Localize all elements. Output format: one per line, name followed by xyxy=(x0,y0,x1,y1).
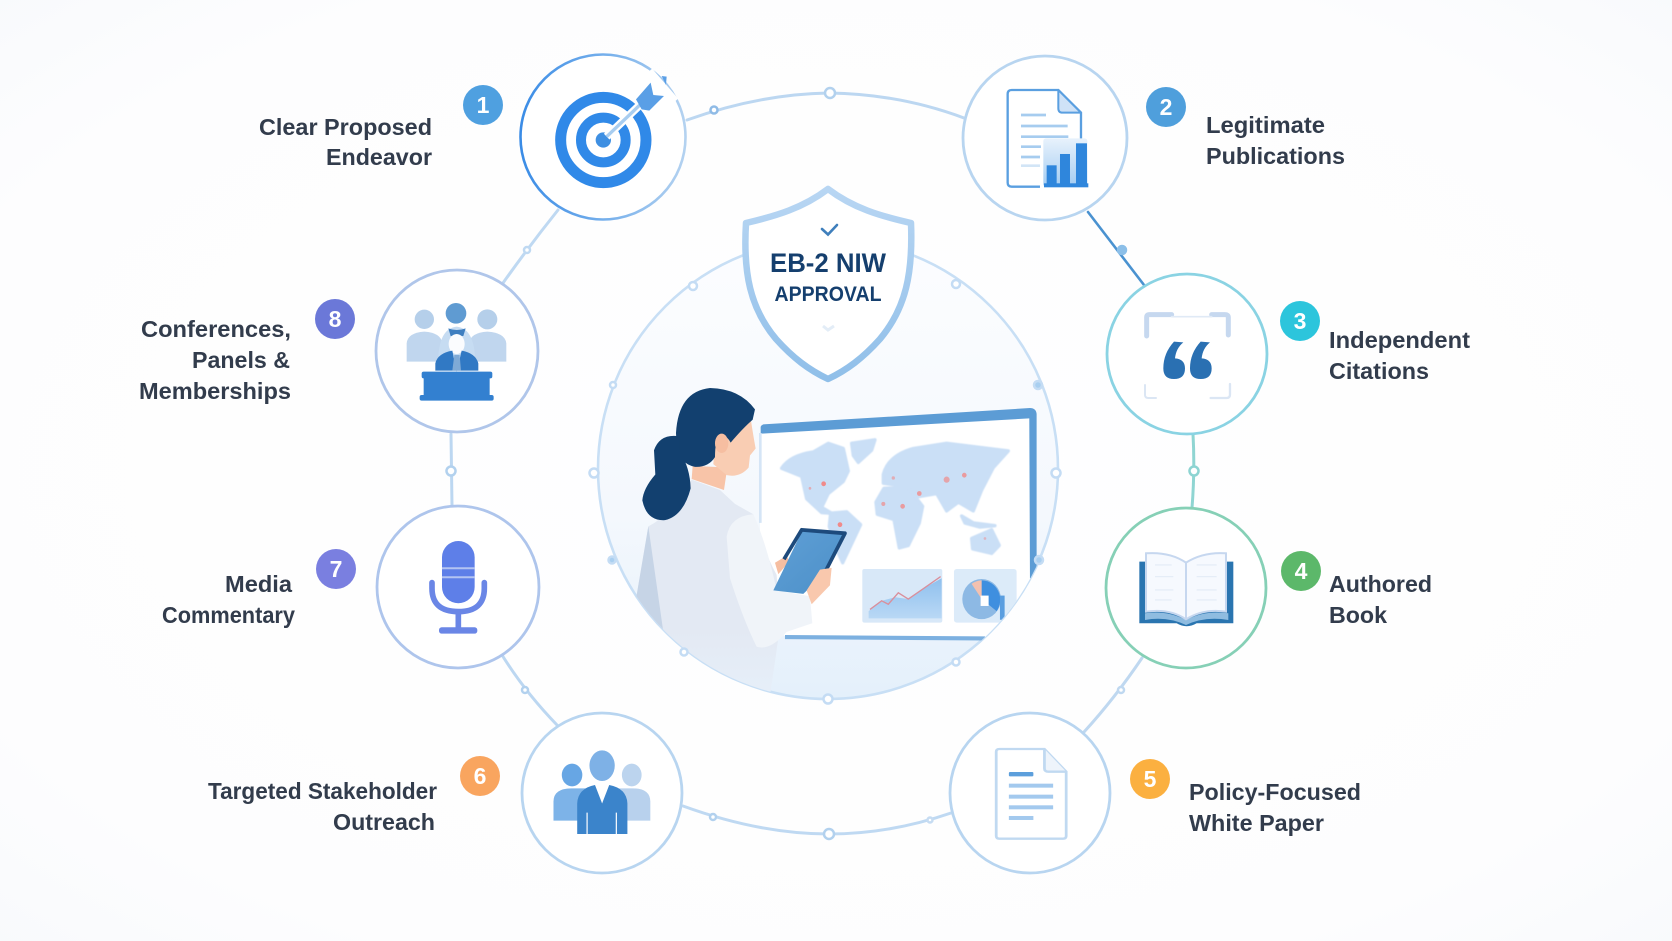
screen xyxy=(759,408,1037,638)
icon: microphone xyxy=(432,541,484,634)
icon: quotation marks xyxy=(1145,315,1230,398)
icon: white paper document xyxy=(996,749,1066,839)
background disc xyxy=(598,239,1058,699)
badge 8 xyxy=(315,299,355,339)
badge 7: 7 xyxy=(330,556,342,582)
panel: step 2 legitimate publications xyxy=(963,56,1345,220)
node circle xyxy=(377,506,539,668)
icon: three stakeholders xyxy=(553,750,650,834)
node circle xyxy=(950,713,1110,873)
label 7: Commentary xyxy=(162,602,295,628)
node circle xyxy=(520,54,686,220)
shield badge xyxy=(745,189,911,379)
label 8: Memberships xyxy=(139,378,291,404)
badge 3: 3 xyxy=(1294,308,1306,334)
label 1: Endeavor xyxy=(326,144,432,170)
panel: step 3 independent citations xyxy=(1107,274,1470,434)
label 8: Conferences, xyxy=(141,316,291,342)
icon: open book xyxy=(1139,553,1233,626)
map hotspots xyxy=(809,473,986,540)
badge 5 xyxy=(1130,759,1170,799)
badge 6 xyxy=(460,756,500,796)
label 4: Book xyxy=(1329,602,1388,628)
icon: target xyxy=(561,70,677,183)
panel: step 5 policy-focused white paper xyxy=(950,713,1361,873)
disc nodes xyxy=(590,280,1060,704)
node circle xyxy=(522,713,682,873)
label 7: Media xyxy=(225,571,293,597)
node circle xyxy=(1107,274,1267,434)
label 3: Independent xyxy=(1329,327,1470,353)
world map xyxy=(782,440,1008,563)
badge 2: 2 xyxy=(1160,94,1172,120)
badge 6: 6 xyxy=(474,763,486,789)
badge 5: 5 xyxy=(1144,766,1157,792)
analyst and world map screen xyxy=(636,388,1037,696)
badge 2 xyxy=(1146,87,1186,127)
analyst figure xyxy=(636,388,845,696)
badge 1: 1 xyxy=(477,92,490,118)
label 5: White Paper xyxy=(1189,810,1324,836)
panel: step 7 media commentary xyxy=(162,506,539,668)
line chart card xyxy=(862,569,942,623)
pie chart card xyxy=(954,569,1017,623)
panel: step 8 conferences, panels and memberships xyxy=(139,270,538,432)
panel: step 1 clear proposed endeavor xyxy=(259,54,686,220)
badge 4 xyxy=(1281,551,1321,591)
shield heading: EB-2 NIW xyxy=(770,248,886,278)
label 6: Targeted Stakeholder xyxy=(208,778,437,804)
label 5: Policy-Focused xyxy=(1189,779,1361,805)
icon: speaker at podium xyxy=(407,303,506,401)
connector ring xyxy=(446,88,1198,839)
panel: step 6 targeted stakeholder outreach xyxy=(208,713,682,873)
label 4: Authored xyxy=(1329,571,1432,597)
label 2: Legitimate xyxy=(1206,112,1325,138)
check mark xyxy=(822,225,837,234)
badge 3 xyxy=(1280,301,1320,341)
label 8: Panels & xyxy=(192,347,290,373)
node circle xyxy=(963,56,1127,220)
label 2: Publications xyxy=(1206,143,1345,169)
panel: step 4 authored book xyxy=(1106,508,1432,668)
icon: document with bar chart xyxy=(1008,90,1088,187)
badge 1 xyxy=(463,85,503,125)
badge 4: 4 xyxy=(1295,558,1308,584)
badge 8: 8 xyxy=(329,306,342,332)
faint chevron xyxy=(823,326,834,330)
node circle xyxy=(376,270,538,432)
shield subheading: APPROVAL xyxy=(774,283,882,306)
label 6: Outreach xyxy=(333,809,435,835)
badge 7 xyxy=(316,549,356,589)
label 3: Citations xyxy=(1329,358,1429,384)
label 1: Clear Proposed xyxy=(259,114,432,140)
central illustration xyxy=(590,189,1060,704)
node circle xyxy=(1106,508,1266,668)
